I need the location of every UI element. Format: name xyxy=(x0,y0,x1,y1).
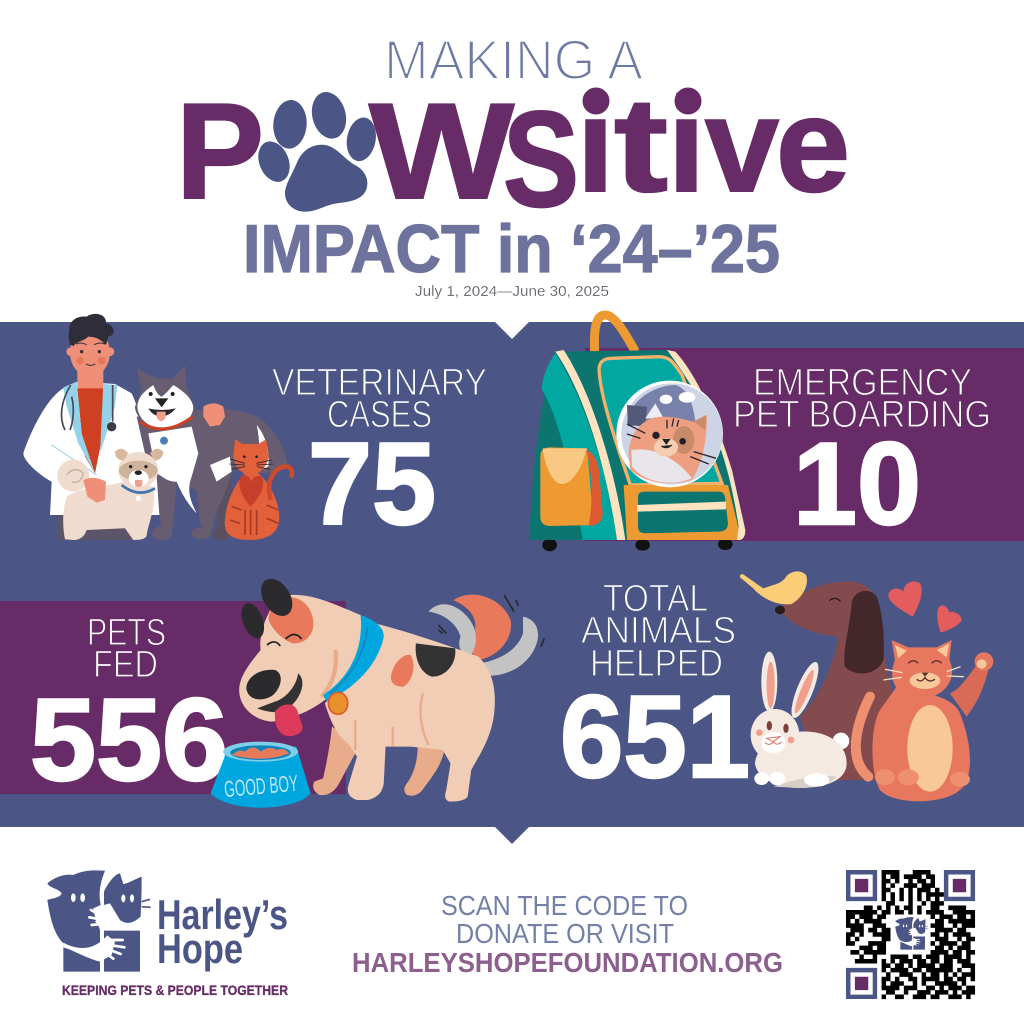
title word: pawsitive: t xyxy=(614,71,668,220)
icon: paw print xyxy=(253,88,379,212)
bowl lettering: good boy: GOOD BOY xyxy=(223,770,299,802)
number: 10: 10 xyxy=(793,418,921,549)
panel: pets fed: FED xyxy=(93,644,158,686)
title word: pawsitive: W xyxy=(369,75,515,227)
number: 651: 651 xyxy=(560,671,750,802)
label: pets fed: PETS xyxy=(87,612,166,654)
date range: July 1, 2024—June 30, 2025 xyxy=(415,283,609,300)
panel: veterinary cases: CASES xyxy=(327,394,432,436)
panel: total animals helped: HELPED xyxy=(590,643,723,685)
title word: pawsitive: i xyxy=(577,71,614,220)
title block xyxy=(176,28,850,300)
stats band background xyxy=(0,322,1024,844)
qr finder patterns and modules xyxy=(846,870,975,999)
title line: impact in 24-25: IMPACT in ‘24–’25 xyxy=(243,211,780,287)
panel: total animals helped: ANIMALS xyxy=(581,610,736,652)
title word: pawsitive: e xyxy=(776,71,850,220)
panel: veterinary cases xyxy=(23,314,487,549)
title word: pawsitive: P xyxy=(176,75,264,227)
number: 556: 556 xyxy=(30,674,228,805)
scan line two: DONATE OR VISIT xyxy=(456,918,674,949)
title line: making a: MAKING A xyxy=(384,28,644,91)
qr centre logo xyxy=(895,917,928,950)
footer logo: harley's hope xyxy=(47,870,288,998)
logo wordmark: Harley’s xyxy=(157,891,288,938)
panel: pets fed xyxy=(30,574,544,808)
title word: pawsitive xyxy=(176,71,850,235)
illustration: cat in backpack carrier xyxy=(529,315,745,551)
illustration: vet with husky, puppy and cat xyxy=(23,314,292,540)
logo tagline: KEEPING PETS & PEOPLE TOGETHER xyxy=(62,982,288,998)
label: veterinary cases: VETERINARY xyxy=(272,362,487,404)
footer logo: harley's hope: Hope xyxy=(157,925,243,972)
title word: pawsitive: v xyxy=(705,71,779,220)
title word: pawsitive: i xyxy=(668,71,705,220)
website url: HARLEYSHOPEFOUNDATION.ORG xyxy=(352,947,783,978)
qr code xyxy=(846,870,975,999)
logo mark: dog and cat hugged xyxy=(47,870,151,972)
label: emergency pet boarding: EMERGENCY xyxy=(753,362,972,404)
call to action text xyxy=(352,890,783,978)
purple panel: emergency boarding xyxy=(585,348,1024,541)
purple panel: pets fed xyxy=(0,601,346,794)
panel: emergency pet boarding xyxy=(529,315,991,551)
illustration: happy dog with food bowl xyxy=(211,574,544,808)
number: 75: 75 xyxy=(308,418,436,549)
title word: pawsitive: S xyxy=(503,83,579,235)
illustration: bird, dog, rabbit and cat xyxy=(740,571,993,801)
label: total animals helped: TOTAL xyxy=(603,578,708,620)
panel: emergency pet boarding: PET BOARDING xyxy=(733,394,991,436)
panel: total animals helped xyxy=(560,571,993,802)
scan line one: SCAN THE CODE TO xyxy=(441,890,688,921)
